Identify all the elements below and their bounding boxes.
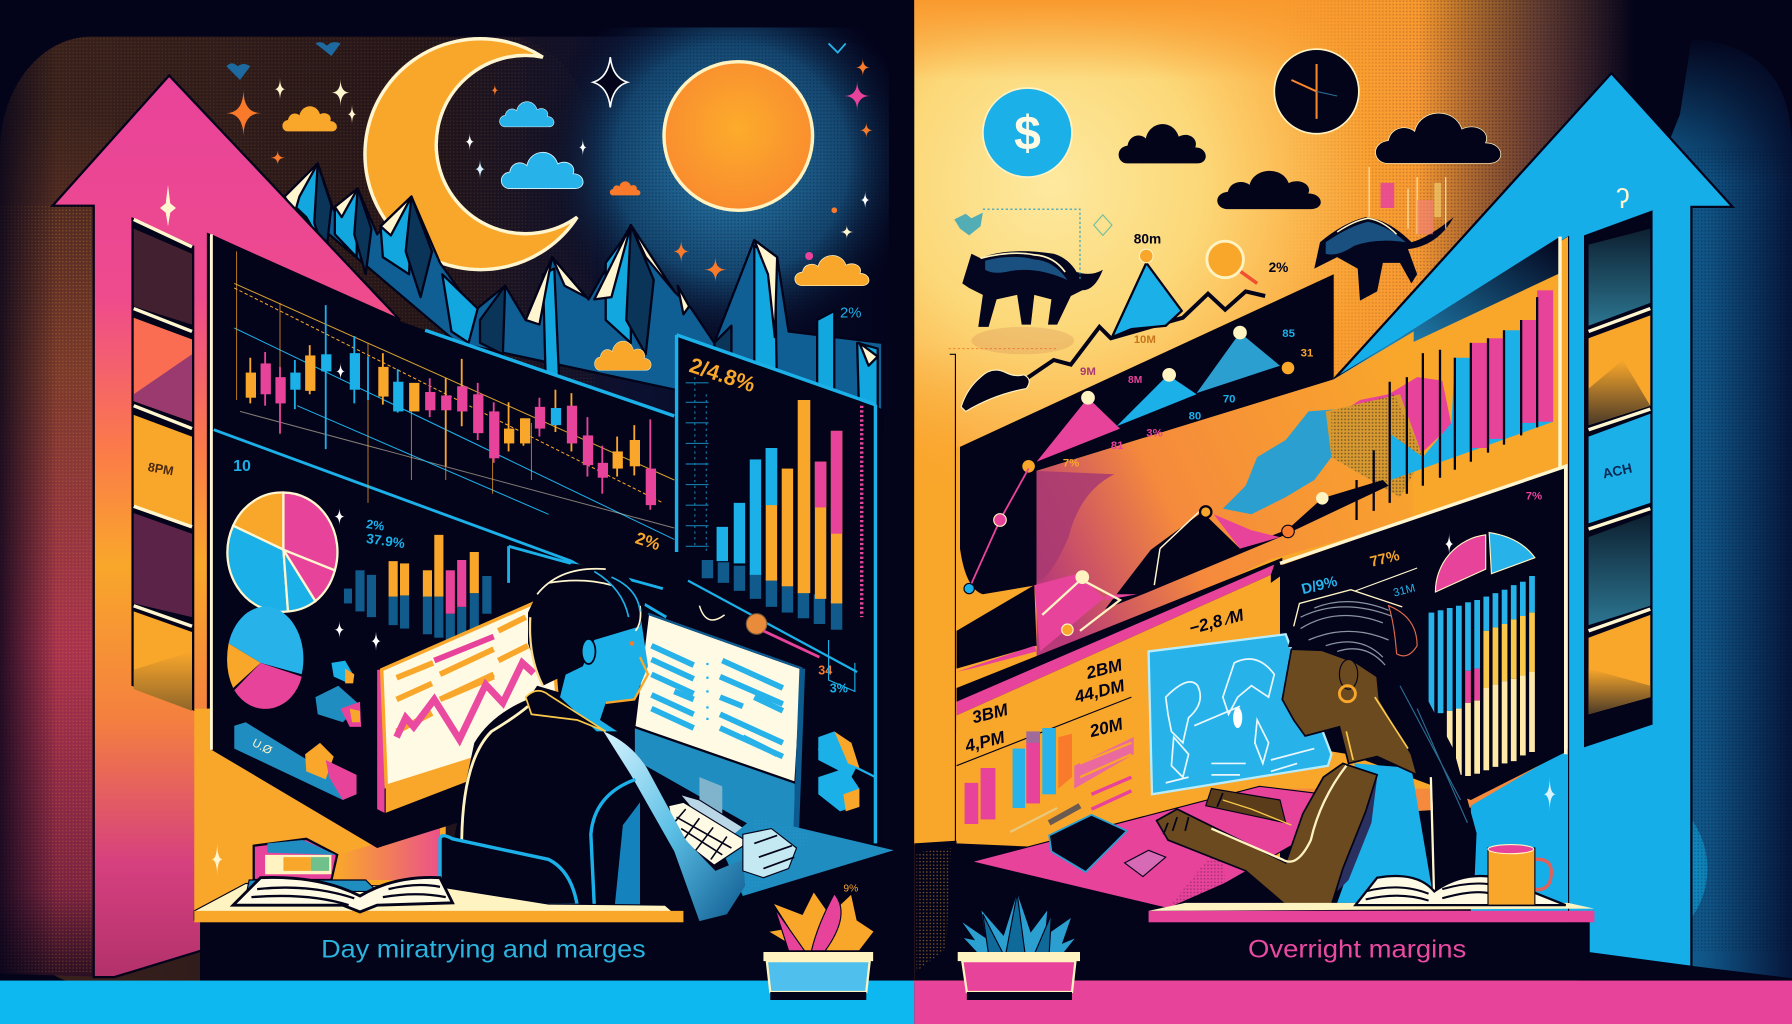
icon: mug — [1488, 845, 1551, 905]
labels: left chart numbers: 2/4.8% — [686, 352, 758, 397]
window strip: right — [1584, 210, 1653, 747]
labels: overnight chart numbers: 8M — [1128, 375, 1142, 386]
bottom band: day — [0, 981, 914, 1024]
night sky icons — [226, 42, 873, 286]
icon: black clouds — [1119, 113, 1501, 209]
small 3D chart chips — [234, 606, 859, 811]
panel: orange stats wall — [957, 575, 1271, 843]
icon: arrow glyph: ʔ — [1616, 183, 1630, 214]
pie chart: lower — [227, 607, 303, 709]
labels: left chart numbers: 2% — [840, 306, 861, 322]
pink and black diagonal bands — [957, 558, 1282, 734]
plant: left: 9% — [843, 883, 858, 894]
mountains — [285, 163, 882, 434]
icon: clock — [1274, 49, 1359, 134]
world map monitor — [1149, 634, 1331, 794]
panel: right black dashboard with pie: D/9% — [1300, 574, 1339, 598]
woman desk — [971, 777, 1371, 909]
panel: right black dashboard with pie: 7% — [1526, 490, 1542, 502]
labels: overnight chart numbers: 7% — [1063, 457, 1079, 469]
labels: overnight chart numbers: 2% — [1269, 260, 1288, 275]
label: window strip value: 8PM — [147, 460, 175, 478]
panel: right black dashboard with pie: 31M — [1392, 582, 1417, 599]
window strip: left — [131, 217, 194, 711]
labels: overnight chart numbers — [966, 231, 1314, 654]
panel: overnight side background — [914, 0, 1792, 983]
desk: overnight — [1149, 876, 1594, 922]
right monitor — [634, 614, 802, 851]
candlestick chart — [234, 251, 674, 539]
line chart: black ridge with peaks — [961, 249, 1294, 594]
labels: left chart numbers: 37.9% — [365, 531, 406, 551]
icon: arrow sparkle — [160, 185, 176, 226]
desk: day — [194, 883, 683, 922]
small test tubes — [1369, 167, 1446, 234]
icon: sparkle right — [1543, 777, 1556, 811]
caption: overnight: Overright margins — [1248, 936, 1466, 964]
sun — [664, 62, 813, 210]
panel: day side background — [0, 0, 926, 985]
panel: orange stats wall: 44,DM — [1072, 675, 1127, 707]
bar chart: upper right of left wall — [686, 377, 862, 630]
area chart: blue wave — [1223, 377, 1451, 514]
small 3D chart chips: 3% — [830, 682, 848, 696]
panel: overnight charts wall — [949, 237, 1568, 857]
panel: right black dashboard with pie — [1280, 466, 1566, 800]
bears and sky icons — [954, 49, 1501, 354]
labels: left chart numbers: 2% — [365, 517, 385, 533]
labels: overnight chart numbers: 80m — [1134, 231, 1161, 246]
labels: overnight chart numbers: 48M — [966, 623, 990, 637]
panel: orange stats wall: 3BM — [970, 699, 1010, 727]
panel: orange stats wall: −2,8 ⁄M — [1187, 604, 1246, 638]
stacked bars: overnight dashboard — [1429, 576, 1535, 776]
bar chart: overnight upper — [1357, 290, 1553, 520]
labels: overnight chart numbers: 10M — [1134, 334, 1156, 346]
plant: left — [763, 883, 874, 1000]
labels: overnight chart numbers: 3% — [1146, 428, 1163, 440]
arrow: blue up arrow — [1334, 73, 1733, 967]
labels: left chart numbers: 2% — [633, 528, 663, 554]
panel: left dashboard wall — [200, 234, 914, 983]
person: overnight trader — [1157, 590, 1477, 905]
books — [211, 839, 453, 912]
person: day trader — [455, 563, 797, 921]
label: right dashboard numbers: 77% — [1369, 548, 1401, 571]
labels: left chart numbers — [233, 306, 861, 554]
bottom band: overnight — [914, 981, 1792, 1024]
labels: overnight chart numbers: 70 — [1223, 393, 1236, 405]
labels: left chart numbers: 10 — [233, 458, 251, 475]
moon — [365, 39, 577, 270]
bar chart: mid left — [334, 507, 491, 651]
panel: orange stats wall: 2BM — [1083, 654, 1125, 683]
label: strip value: ACH — [1601, 461, 1633, 481]
label: chip value: U.Ø — [250, 737, 274, 757]
icon: small cloud over wall — [594, 341, 651, 370]
blue desk and keyboard — [669, 802, 894, 896]
chair — [440, 836, 577, 905]
icon: bear one — [962, 251, 1103, 354]
labels: overnight chart numbers: PM% — [979, 643, 1004, 654]
left monitor — [377, 597, 560, 814]
icon: dollar coin: $ — [1014, 108, 1041, 161]
panel: orange stats wall: 4,PM — [962, 727, 1007, 756]
icon: magnifier — [1207, 241, 1257, 283]
labels: overnight chart numbers: 81 — [1111, 440, 1124, 452]
arrow: pink up arrow — [53, 75, 400, 977]
plant: right — [958, 891, 1080, 1000]
labels: overnight chart numbers: 85 — [1282, 328, 1296, 340]
cyan area behind overnight trader — [1471, 749, 1568, 914]
labels: overnight chart numbers: 80 — [1189, 410, 1201, 422]
line chart: lower ridge — [1034, 480, 1389, 651]
icon: dollar coin — [983, 88, 1072, 177]
labels: overnight chart numbers: 9M — [1080, 366, 1096, 378]
icon: bear two — [1314, 217, 1454, 301]
labels: overnight chart numbers: 31 — [1301, 348, 1314, 360]
orange floor area — [194, 709, 446, 914]
label: right chip values: 34 — [818, 663, 832, 677]
caption: day: Day miratrying and marges — [321, 936, 646, 964]
pie chart: upper — [227, 493, 337, 612]
panel: orange stats wall: 20M — [1087, 713, 1125, 741]
